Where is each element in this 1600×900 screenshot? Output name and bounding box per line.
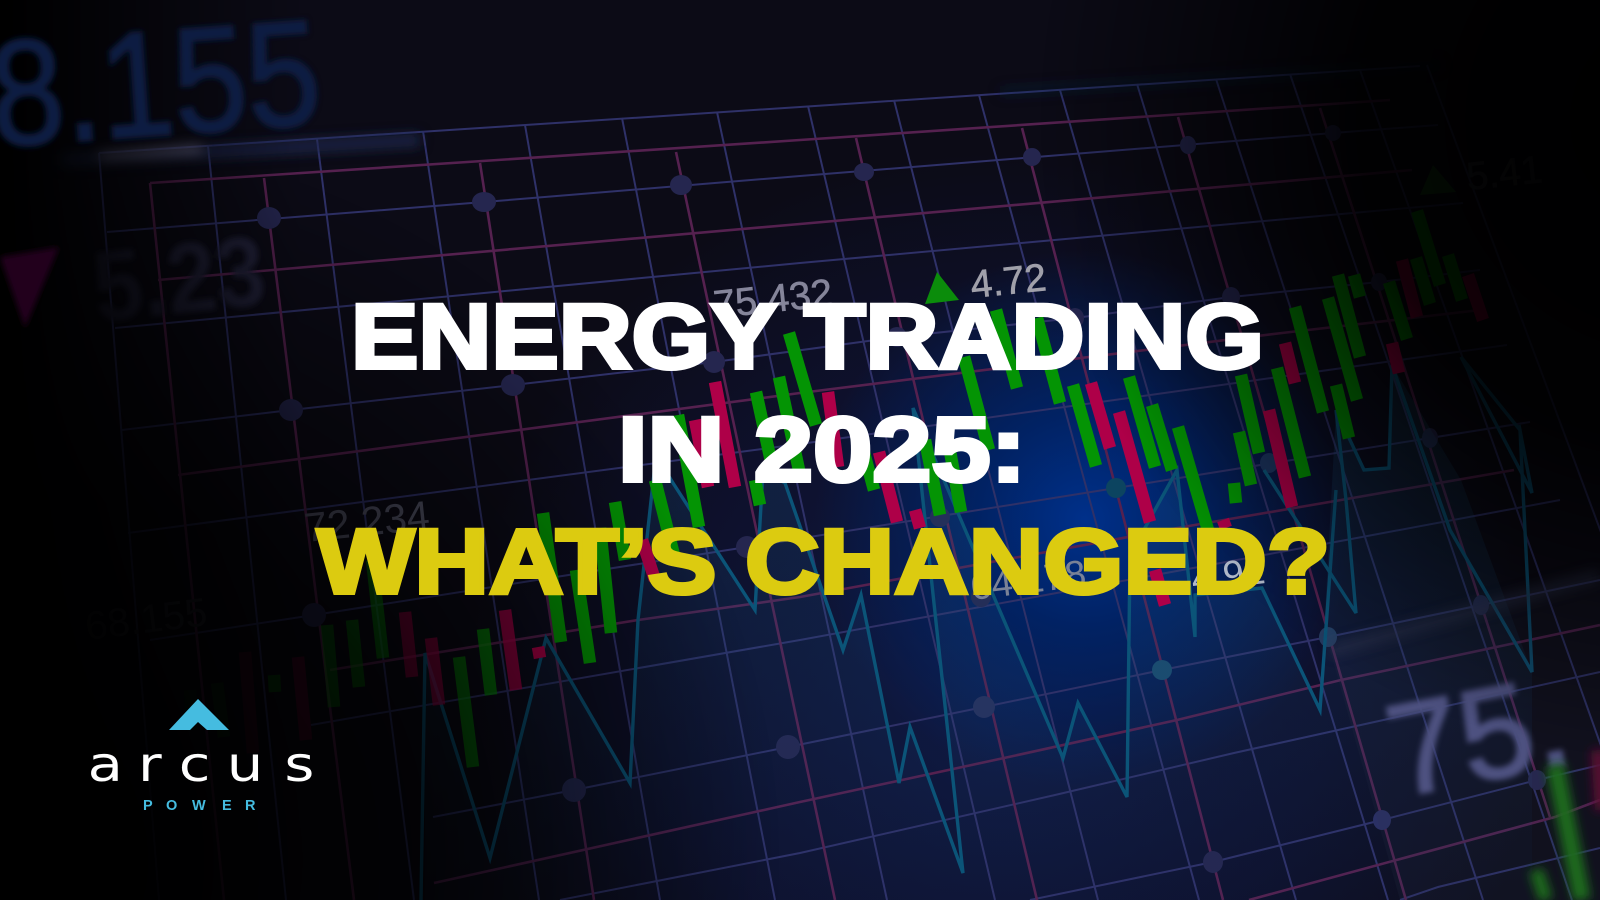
- blurred down arrow: [0, 247, 59, 328]
- logo subtitle: POWER: [143, 798, 256, 814]
- icon: logo arrow: [169, 699, 229, 730]
- blurred number: 5.23: 5.23: [88, 215, 270, 344]
- candlesticks: green: [190, 211, 1462, 767]
- number labels on the chart: 4.91: [1189, 550, 1268, 601]
- number labels on the chart: 64.178: [968, 553, 1088, 609]
- title: [317, 286, 1330, 613]
- title line 3: WHAT’S CHANGED?: [317, 511, 1330, 613]
- number labels on the chart: 68.155: [83, 590, 210, 649]
- title line 2: IN 2025:: [618, 399, 1026, 501]
- number labels on the chart: 5.41: [1464, 148, 1544, 199]
- top streak highlight: [60, 65, 1440, 160]
- logo: Arcus Power: [88, 699, 314, 814]
- trend arrows: [925, 165, 1456, 304]
- blurred candles, bottom right: [1536, 750, 1600, 900]
- glass panel and blurred streak, bottom right: [1330, 575, 1600, 900]
- title line 1: ENERGY TRADING: [351, 286, 1264, 388]
- grid node dots: [257, 125, 1546, 873]
- number labels on the chart: 4.72: [968, 256, 1048, 307]
- line chart: shaded area: [425, 365, 1532, 900]
- number labels on the chart: [83, 148, 1544, 649]
- number labels on the chart: 72.234: [302, 492, 432, 551]
- line chart: price line: [421, 357, 1532, 900]
- candlesticks: red: [245, 260, 1483, 753]
- number labels on the chart: 75.432: [711, 272, 835, 327]
- logo wordmark: arcus: [88, 737, 314, 793]
- blurred number: 75.: 75.: [1375, 647, 1581, 824]
